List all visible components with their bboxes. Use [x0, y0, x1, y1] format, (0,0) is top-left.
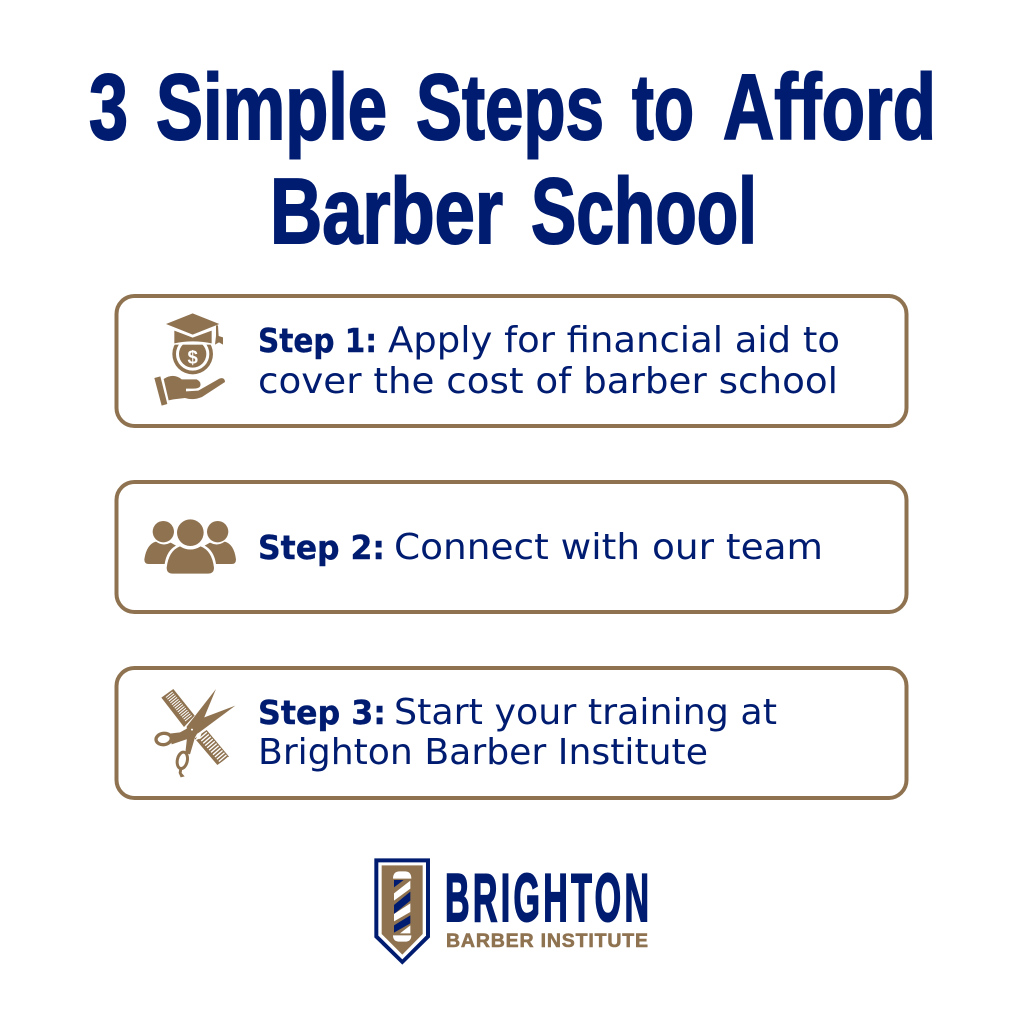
step 2 text: Step 2:: [258, 528, 385, 567]
title: to: [632, 55, 694, 159]
title: Steps: [416, 55, 604, 159]
step 1 text: Step 1:: [258, 321, 377, 360]
step 1 text: Apply for financial aid to: [388, 320, 840, 361]
step 2 text: Connect with our team: [394, 527, 823, 568]
icon: graduation cap, coin and hand: [154, 313, 225, 406]
title: Simple: [156, 55, 387, 159]
title: 3: [89, 55, 128, 159]
icon: graduation cap, coin and hand: $: [187, 346, 198, 367]
title: [89, 55, 936, 263]
title: Afford: [723, 55, 936, 159]
icon: comb and scissors: [155, 689, 235, 777]
step 3 text: Brighton Barber Institute: [258, 732, 708, 773]
title: School: [531, 159, 757, 263]
wordmark: BRIGHTON: [445, 860, 649, 936]
icon: group of people: [144, 519, 236, 574]
step 3 text: Start your training at: [394, 692, 777, 733]
icon: barber pole shield: [374, 858, 430, 965]
step 3 text: Step 3:: [258, 693, 386, 732]
tagline: BARBER INSTITUTE: [446, 930, 648, 952]
step 3 text: [258, 692, 777, 773]
step 1 text: [258, 320, 840, 402]
panel: step 3: [116, 668, 906, 798]
logo: Brighton Barber Institute: [374, 858, 649, 965]
title: Barber: [270, 159, 503, 263]
panel: step 1: [116, 296, 906, 426]
step 1 text: cover the cost of barber school: [258, 361, 838, 402]
panel: step 2: [116, 482, 906, 612]
